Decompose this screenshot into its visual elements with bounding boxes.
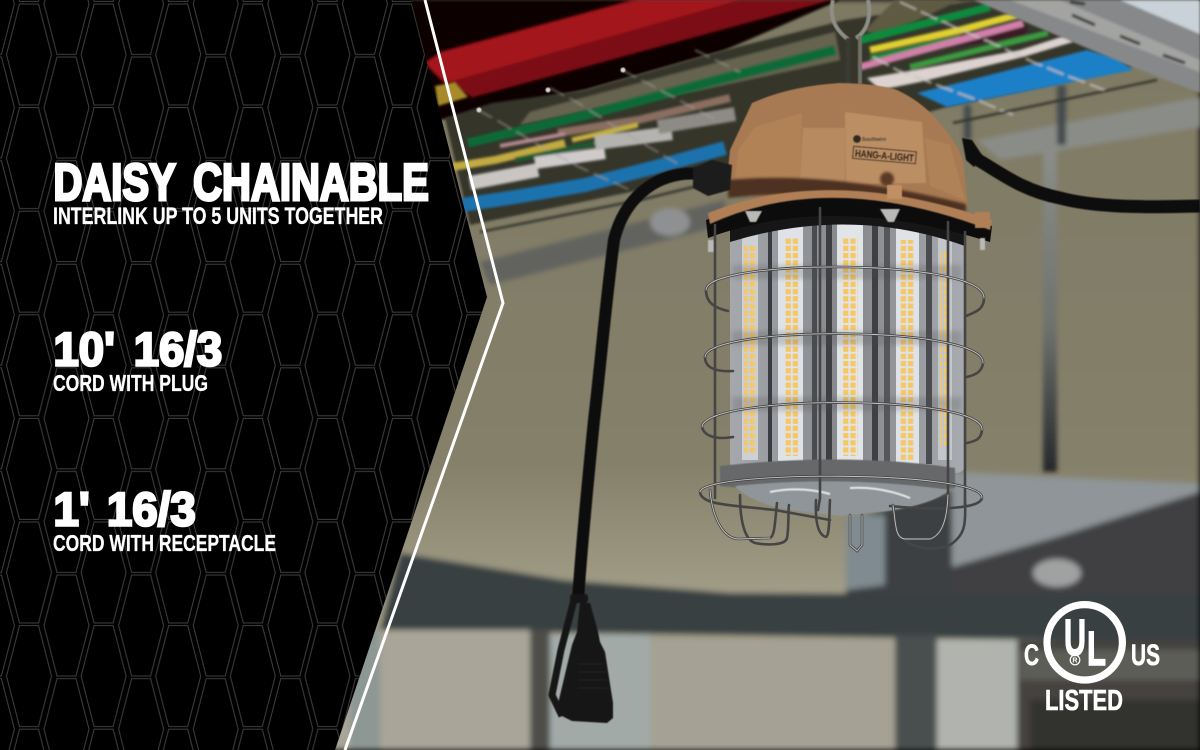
heading: 1' 16/3 xyxy=(54,483,196,536)
subheading: CORD WITH PLUG xyxy=(53,370,208,396)
left black panel with hexagon pattern xyxy=(0,0,487,750)
feature: 1 foot cord xyxy=(53,483,276,556)
photo background: ceiling, wall and duct xyxy=(330,0,1200,750)
dark hub under ring xyxy=(730,211,965,246)
UL listed certification mark: LISTED xyxy=(1045,685,1123,717)
UL listed certification mark: U xyxy=(1064,609,1086,666)
UL listed certification mark: US xyxy=(1131,639,1160,672)
mesh wires xyxy=(873,2,1110,115)
Hang-A-Light logo xyxy=(853,146,916,165)
left cord gland xyxy=(693,160,732,196)
white chevron line xyxy=(345,0,503,750)
feature: daisy chainable xyxy=(53,153,429,230)
plug with strap xyxy=(552,594,613,723)
Southwire brand label: Southwire xyxy=(862,137,886,143)
ceiling darkness and red tubes xyxy=(405,0,840,120)
left cord xyxy=(578,174,700,600)
lens base xyxy=(720,459,955,516)
hook xyxy=(832,0,869,84)
steel cable tray upper right xyxy=(973,0,1200,93)
UL listed certification mark: R xyxy=(1072,658,1077,664)
product: hang-a-light fixture xyxy=(693,0,992,551)
LED column xyxy=(730,223,966,473)
mounting screws xyxy=(708,209,985,252)
beam xyxy=(380,553,1200,642)
duct xyxy=(952,472,1200,600)
wire tray cables xyxy=(452,2,1157,232)
metal clips xyxy=(476,68,626,112)
heading: DAISY CHAINABLE xyxy=(54,153,429,211)
heading: 10' 16/3 xyxy=(54,323,222,376)
UL listed certification mark xyxy=(1024,605,1160,717)
lower panels xyxy=(330,630,545,750)
feature: 10 foot cord xyxy=(53,323,222,396)
conduits behind fixture xyxy=(480,85,1200,472)
wire cage xyxy=(700,208,984,551)
subheading: CORD WITH RECEPTACLE xyxy=(53,530,276,556)
UL listed certification mark: C xyxy=(1024,639,1039,672)
subheading: INTERLINK UP TO 5 UNITS TOGETHER xyxy=(53,203,383,230)
Hang-A-Light logo: HANG-A-LIGHT xyxy=(855,148,914,165)
wire tray floor xyxy=(435,0,1133,225)
photo: cords and plug xyxy=(552,157,1200,723)
black mounting ring xyxy=(706,196,992,242)
copper flange xyxy=(708,185,992,230)
right cord xyxy=(973,157,1200,207)
copper housing dome xyxy=(727,83,968,212)
UL listed certification mark: L xyxy=(1087,623,1106,676)
right cord gland xyxy=(962,138,982,167)
